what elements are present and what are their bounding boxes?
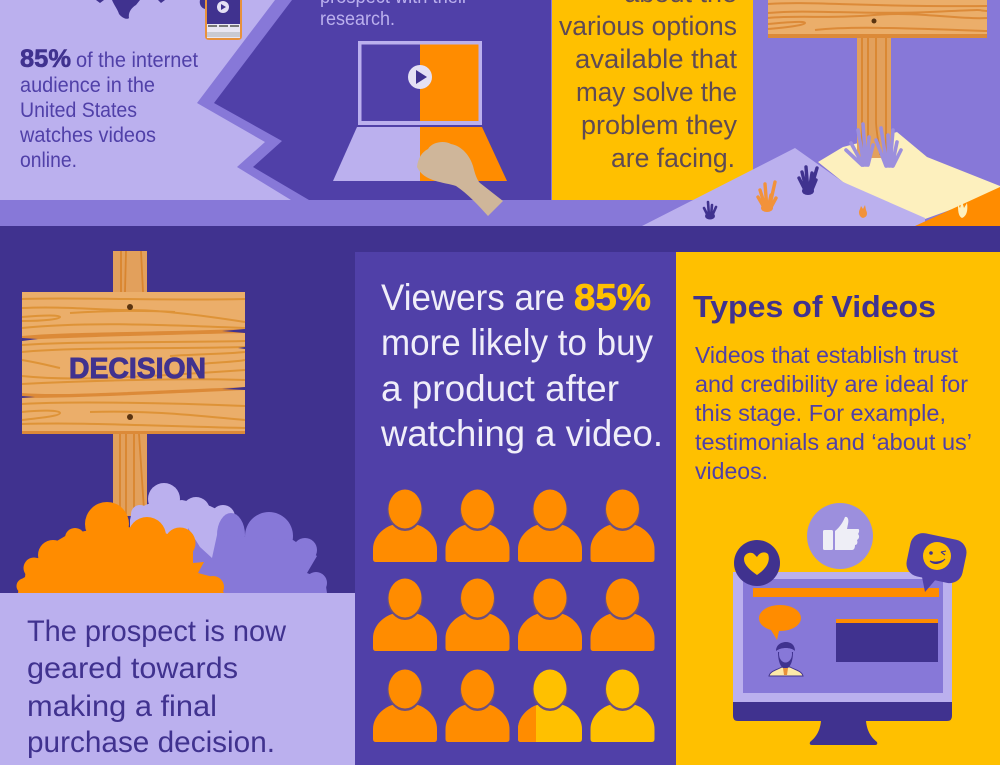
stat: 85% of internet audience: United States bbox=[20, 99, 137, 122]
person bbox=[446, 490, 510, 562]
heading: types of videos: Types of Videos bbox=[693, 289, 936, 324]
text: final purchase decision: The prospect is now bbox=[27, 615, 286, 648]
stat: 85% of internet audience: audience in the bbox=[20, 74, 155, 97]
icon: wink emoji bubble bbox=[904, 531, 969, 592]
presenter bbox=[769, 642, 803, 676]
icon: laptop bbox=[333, 41, 507, 181]
sign post bbox=[857, 38, 891, 158]
text: types of videos body: and credibility are ideal for bbox=[695, 371, 968, 397]
grass: small dark tuft bbox=[704, 202, 716, 220]
label: decision: DECISION bbox=[69, 353, 206, 385]
person bbox=[590, 578, 654, 651]
grass: white tuft bbox=[958, 201, 967, 218]
person bbox=[373, 578, 437, 651]
sign board bbox=[768, 0, 987, 38]
section strip bbox=[0, 0, 1000, 226]
sign: decision bbox=[22, 251, 245, 516]
person bbox=[518, 578, 582, 651]
stat: viewers 85%: 85% bbox=[574, 277, 651, 318]
panel: viewers statistic bbox=[355, 252, 676, 765]
stat: 85% of internet audience: watches videos bbox=[19, 124, 156, 147]
panel: options bbox=[552, 0, 753, 200]
illustration: signpost and hills bbox=[642, 0, 1000, 226]
text: final purchase decision: geared towards bbox=[27, 652, 238, 685]
text: various options: are facing. bbox=[611, 143, 735, 173]
stat: viewers 85% bbox=[380, 277, 663, 454]
person bbox=[373, 670, 437, 742]
text: types of videos body: testimonials and ‘about us’ bbox=[695, 429, 972, 455]
icon: monitor bbox=[733, 572, 952, 745]
bushes bbox=[16, 483, 327, 598]
sign board bbox=[22, 292, 245, 434]
grass: dark tuft bbox=[799, 167, 817, 195]
text: various options: available that bbox=[575, 44, 737, 74]
person bbox=[590, 490, 654, 562]
text: final purchase decision: making a final bbox=[27, 690, 217, 723]
stat: 85% of internet audience: of the internet bbox=[76, 49, 198, 72]
stat: 85% of internet audience: online. bbox=[20, 149, 77, 172]
icon: hand bbox=[417, 142, 503, 216]
text: various options: problem they bbox=[581, 110, 737, 140]
person bbox=[590, 670, 654, 742]
sign post bbox=[113, 251, 147, 516]
icon: phone bbox=[200, 0, 242, 40]
panel: internet audience bbox=[0, 0, 291, 200]
stat: 85% of internet audience: 85% bbox=[20, 45, 71, 73]
icon: heart bbox=[734, 540, 780, 586]
person bbox=[373, 490, 437, 562]
bush: purple bbox=[188, 512, 327, 594]
panel: types of videos bbox=[676, 252, 1000, 765]
speech bubble bbox=[759, 605, 801, 640]
icon: thumbs up bbox=[807, 503, 873, 569]
person bbox=[446, 578, 510, 651]
person: partly filled bbox=[518, 670, 582, 742]
hill: lavender bbox=[642, 148, 925, 226]
text: various options bbox=[559, 0, 737, 173]
pictogram: people bbox=[373, 490, 654, 742]
text: various options: may solve the bbox=[576, 77, 737, 107]
text: types of videos body: videos. bbox=[695, 458, 768, 484]
stat: viewers 85%: more likely to buy bbox=[381, 322, 653, 363]
person bbox=[518, 490, 582, 562]
stat: viewers 85%: watching a video. bbox=[380, 413, 663, 454]
grass: small orange tuft bbox=[859, 205, 867, 218]
text: types of videos body: Videos that establish trust bbox=[695, 342, 959, 368]
person bbox=[446, 670, 510, 742]
hill: cream bbox=[818, 132, 1000, 219]
text: final purchase decision: purchase decision. bbox=[27, 726, 275, 759]
bush: orange bbox=[16, 502, 224, 598]
text: types of videos body: this stage. For example, bbox=[695, 400, 946, 426]
text: final purchase decision bbox=[27, 615, 286, 759]
stat: viewers 85%: Viewers are bbox=[381, 277, 565, 318]
text: various options: various options bbox=[559, 11, 737, 41]
panel: prospect decision bbox=[0, 593, 355, 765]
text: research: research. bbox=[320, 9, 395, 30]
text: research bbox=[320, 0, 469, 30]
grass: post tufts bbox=[846, 124, 901, 166]
hill: orange bbox=[915, 187, 1000, 226]
grass: orange tuft bbox=[758, 182, 776, 212]
stat: 85% of internet audience bbox=[19, 45, 198, 172]
stat: viewers 85%: a product after bbox=[381, 368, 619, 409]
text: types of videos body bbox=[695, 342, 972, 484]
bush: lavender bbox=[130, 483, 235, 570]
panel: research with zigzag edge bbox=[214, 0, 551, 216]
icon: world map bbox=[96, 0, 165, 19]
